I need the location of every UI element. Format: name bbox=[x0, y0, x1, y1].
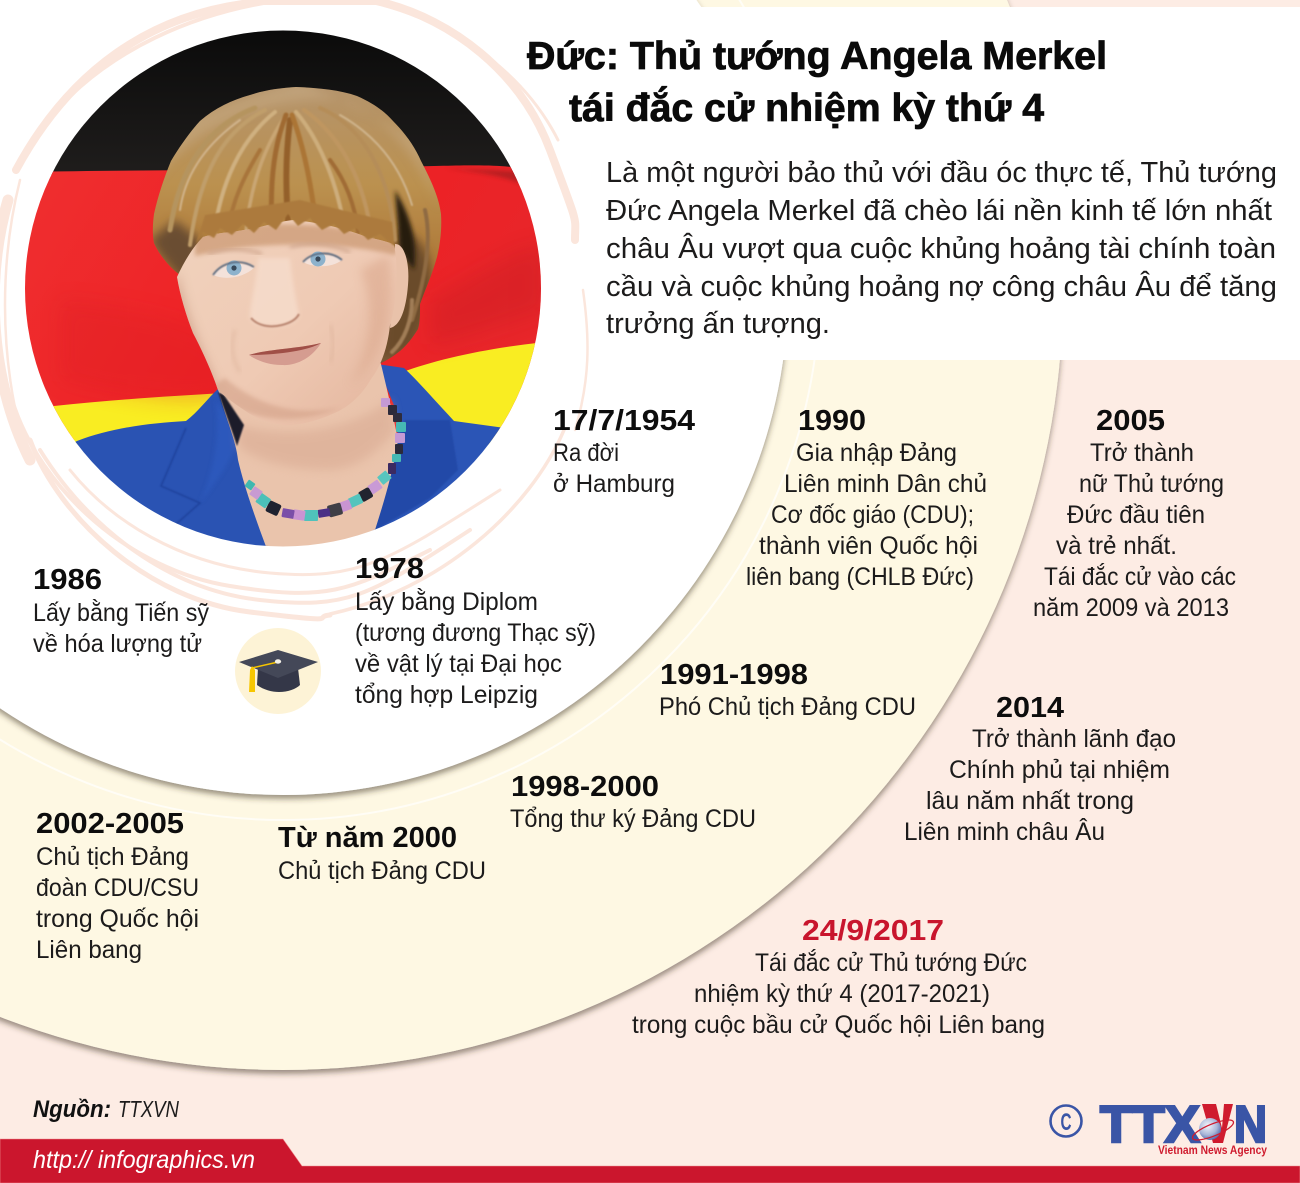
logo: copyright and TTXVN Vietnam News Agency bbox=[1050, 1096, 1268, 1157]
jacket right bbox=[374, 364, 500, 530]
event: 1986: Lấy bằng Tiến sỹ bbox=[33, 598, 209, 627]
neck and chest bbox=[218, 360, 398, 552]
brush ring around portrait bbox=[0, 0, 588, 619]
event: 2002-2005: Liên bang bbox=[36, 936, 142, 964]
event: Từ năm 2000: Từ năm 2000 bbox=[278, 822, 457, 854]
event: 1990: thành viên Quốc hội bbox=[759, 532, 978, 560]
footer red bar with url tab bbox=[0, 1139, 1300, 1183]
event: 2014: lâu năm nhất trong bbox=[926, 787, 1134, 815]
event: 1991-1998 bbox=[659, 659, 916, 721]
event: 2005: nữ Thủ tướng bbox=[1079, 470, 1224, 498]
flag: red band bbox=[20, 165, 550, 440]
portrait: Angela Merkel before German flag bbox=[20, 25, 550, 560]
event: 1990: Gia nhập Đảng bbox=[796, 439, 957, 467]
event: 2002-2005: 2002-2005 bbox=[36, 808, 184, 840]
title: tái đắc cử nhiệm kỳ thứ 4 bbox=[569, 86, 1044, 130]
eyes bbox=[208, 244, 350, 278]
event: 2005: 2005 bbox=[1096, 405, 1165, 437]
event: 24/9/2017: Tái đắc cử Thủ tướng Đức bbox=[755, 948, 1027, 977]
event: 17/7/1954: Ra đời bbox=[553, 439, 619, 467]
logo: copyright and TTXVN Vietnam News Agency: Vietnam News Agency bbox=[1158, 1145, 1268, 1157]
mouth bbox=[249, 343, 321, 365]
event: 17/7/1954: 17/7/1954 bbox=[553, 405, 695, 437]
band: early life white disc bbox=[0, 0, 788, 795]
footer red bar with url tab: http:// infographics.vn bbox=[33, 1146, 255, 1174]
intro paragraph: cầu và cuộc khủng hoảng nợ công châu Âu để tăng bbox=[606, 270, 1277, 303]
event: 1990: liên bang (CHLB Đức) bbox=[746, 563, 974, 591]
event: 2002-2005 bbox=[36, 808, 199, 964]
event: 2002-2005: Chủ tịch Đảng bbox=[36, 843, 189, 871]
event: 2005: và trẻ nhất. bbox=[1056, 532, 1177, 560]
event: 2014 bbox=[904, 692, 1176, 846]
intro paragraph: châu Âu vượt qua cuộc khủng hoảng tài chính toàn bbox=[606, 232, 1276, 265]
band: career timeline cream ring bbox=[0, 0, 1063, 1070]
event: 24/9/2017: 24/9/2017 bbox=[802, 915, 944, 947]
icon: graduation cap bbox=[235, 628, 321, 714]
source line: Nguồn: bbox=[33, 1096, 111, 1123]
event: 1978: tổng hợp Leipzig bbox=[355, 681, 538, 709]
ear bbox=[390, 244, 408, 328]
header white panel bbox=[560, 7, 1300, 360]
intro paragraph: Đức Angela Merkel đã chèo lái nền kinh tế lớn nhất bbox=[606, 195, 1272, 227]
event: 1998-2000: 1998-2000 bbox=[511, 771, 659, 803]
event: 1978: 1978 bbox=[355, 553, 424, 585]
event: 1986: 1986 bbox=[33, 564, 102, 596]
source line bbox=[33, 1096, 179, 1123]
event: 1986 bbox=[33, 564, 209, 658]
event: 2005: Tái đắc cử vào các bbox=[1044, 562, 1236, 591]
event: 2005 bbox=[1033, 405, 1236, 622]
event: 1998-2000 bbox=[510, 771, 756, 833]
fringe tips bbox=[196, 200, 394, 246]
event: 2005: Trở thành bbox=[1090, 439, 1194, 467]
jacket left bbox=[75, 389, 268, 546]
event: 1990: 1990 bbox=[798, 405, 866, 437]
event: 1978: Lấy bằng Diplom bbox=[355, 587, 538, 616]
event: 24/9/2017 bbox=[632, 915, 1045, 1039]
event: Từ năm 2000 bbox=[278, 822, 486, 885]
event: 2005: năm 2009 và 2013 bbox=[1033, 594, 1229, 622]
flag: yellow band bbox=[20, 342, 545, 445]
event: 2002-2005: đoàn CDU/CSU bbox=[36, 874, 199, 902]
title: Đức: Thủ tướng Angela Merkel bbox=[527, 35, 1107, 78]
event: 2002-2005: trong Quốc hội bbox=[36, 905, 199, 933]
face shading bbox=[170, 224, 400, 419]
event: 1990: Cơ đốc giáo (CDU); bbox=[771, 501, 974, 529]
event: 1990 bbox=[746, 405, 987, 591]
logo: copyright and TTXVN Vietnam News Agency: C bbox=[1060, 1109, 1072, 1136]
event: 2014: Chính phủ tại nhiệm bbox=[949, 756, 1170, 784]
event: 24/9/2017: nhiệm kỳ thứ 4 (2017-2021) bbox=[694, 980, 990, 1008]
event: 2005: Đức đầu tiên bbox=[1067, 501, 1205, 529]
event: 2014: Liên minh châu Âu bbox=[904, 817, 1105, 846]
intro paragraph: Là một người bảo thủ với đầu óc thực tế, Thủ tướng bbox=[606, 157, 1277, 189]
event: 24/9/2017: trong cuộc bầu cử Quốc hội Liên bang bbox=[632, 1011, 1045, 1039]
event: 17/7/1954: ở Hamburg bbox=[553, 470, 675, 498]
necklace bbox=[244, 398, 406, 521]
intro paragraph: trưởng ấn tượng. bbox=[606, 308, 830, 340]
event: 2014: 2014 bbox=[996, 692, 1064, 724]
source line: TTXVN bbox=[118, 1096, 179, 1122]
logo: copyright and TTXVN Vietnam News Agency: N bbox=[1234, 1096, 1267, 1154]
event: 1978 bbox=[355, 553, 596, 709]
flag: black band bbox=[51, 30, 515, 175]
event: 1991-1998: Phó Chủ tịch Đảng CDU bbox=[659, 693, 916, 721]
face bbox=[177, 220, 396, 425]
event: 1978: về vật lý tại Đại học bbox=[355, 650, 562, 678]
nose bbox=[250, 258, 299, 326]
event: 1986: về hóa lượng tử bbox=[33, 630, 202, 658]
event: 1998-2000: Tổng thư ký Đảng CDU bbox=[510, 805, 756, 833]
event: 17/7/1954 bbox=[553, 405, 695, 498]
thin white arc in cream band bbox=[0, 0, 820, 820]
event: Từ năm 2000: Chủ tịch Đảng CDU bbox=[278, 857, 486, 885]
logo: copyright and TTXVN Vietnam News Agency: TTX bbox=[1100, 1096, 1200, 1154]
event: 2014: Trở thành lãnh đạo bbox=[972, 725, 1176, 753]
hair bbox=[150, 80, 445, 370]
intro paragraph bbox=[606, 157, 1277, 340]
title bbox=[527, 35, 1107, 130]
event: 1991-1998: 1991-1998 bbox=[660, 659, 808, 691]
event: 1990: Liên minh Dân chủ bbox=[784, 470, 987, 498]
event: 1978: (tương đương Thạc sỹ) bbox=[355, 619, 596, 647]
